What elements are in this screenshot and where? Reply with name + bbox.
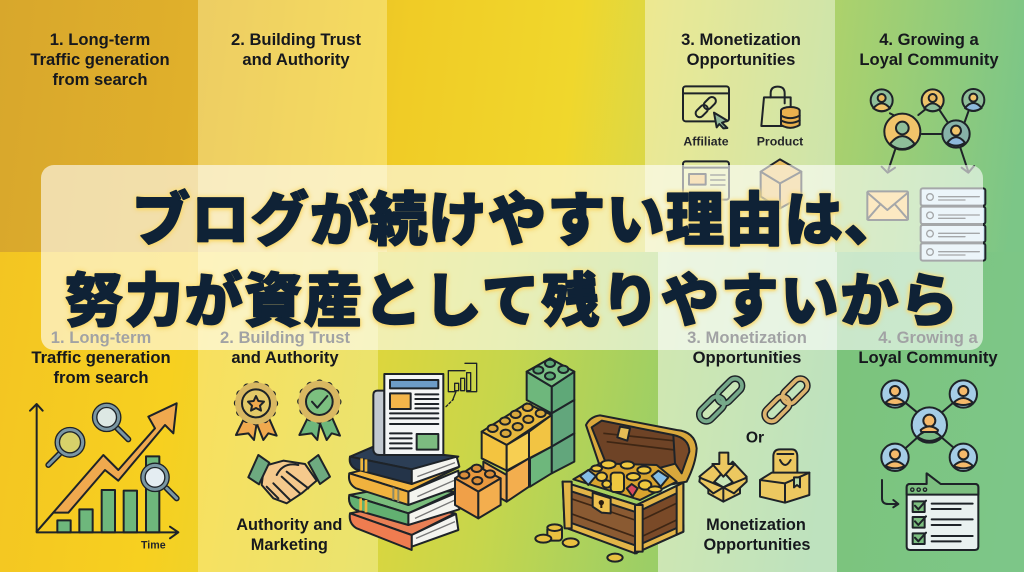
icon: loose coins — [535, 524, 623, 562]
hub person — [912, 407, 947, 443]
arrow heads — [882, 166, 974, 173]
title line 1: ブログが続けやすい理由は、 — [132, 188, 902, 253]
label: monetization opportunities: Opportunities — [703, 536, 811, 554]
upper heading 4: 4. Growing a — [879, 30, 980, 49]
person top right — [950, 380, 977, 408]
upper heading 1: Traffic generation — [30, 50, 170, 69]
panel: authority icons — [236, 383, 342, 554]
bars — [57, 456, 159, 532]
upper heading 3: 3. Monetization — [681, 30, 801, 49]
icon: check medal — [299, 383, 340, 440]
lower heading 3: Opportunities — [693, 348, 801, 367]
icon: faded content window — [683, 161, 729, 200]
icon: stacked list — [921, 188, 985, 261]
icon: shopping bag and coins — [761, 87, 800, 128]
icon: orange chain link — [762, 376, 810, 424]
icon: building blocks — [455, 358, 574, 518]
label: or: Or — [746, 430, 764, 447]
background: lower gradient — [0, 252, 1024, 572]
panel: upper community icons — [867, 89, 985, 261]
community hub small — [942, 120, 970, 148]
upper heading 2: 2. Building Trust — [231, 30, 361, 49]
lower light column 2 — [198, 252, 378, 572]
lower heading 2: 2. Building Trust — [220, 328, 350, 347]
icon: envelope — [867, 191, 908, 220]
label: monetization opportunities: Monetization — [706, 516, 806, 534]
upper heading 3: Opportunities — [687, 50, 795, 69]
lower heading 3: 3. Monetization — [687, 328, 807, 347]
translucent title panel — [41, 165, 983, 350]
icon: handshake — [248, 455, 330, 503]
magnifier on bar — [143, 465, 177, 498]
network connector lines — [888, 108, 968, 172]
icon: stacked books — [349, 447, 459, 550]
community member 1 — [871, 89, 893, 111]
axes — [30, 404, 178, 538]
panel: lower community icons — [881, 380, 978, 550]
arrow — [882, 480, 898, 507]
upper heading 1: from search — [52, 70, 148, 89]
magnifier top — [95, 405, 128, 439]
icon: newspaper — [373, 374, 443, 455]
upper light column 2 — [198, 0, 387, 252]
person bottom right — [950, 444, 977, 471]
panel: central assets illustration — [349, 358, 697, 562]
icon: treasure chest — [563, 415, 697, 553]
background: upper gradient — [0, 0, 1024, 252]
lower heading 2: and Authority — [231, 348, 339, 367]
icon: checklist window — [907, 473, 978, 550]
panel: lower monetization icons — [696, 376, 811, 554]
label: authority and marketing: Authority and — [236, 516, 342, 534]
panel: upper monetization icons — [683, 86, 803, 208]
lower heading 4: Loyal Community — [858, 348, 998, 367]
network connector lines — [900, 398, 958, 452]
community member 3 — [962, 89, 984, 111]
community member 2 — [922, 89, 944, 111]
label: affiliate: Affiliate — [683, 134, 729, 148]
lower heading 1: Traffic generation — [31, 348, 171, 367]
growth arrow — [37, 403, 177, 532]
upper heading 4: Loyal Community — [859, 50, 999, 69]
lower heading 1: from search — [54, 368, 148, 387]
lower heading 4: 4. Growing a — [878, 328, 979, 347]
lower light column 3 — [658, 252, 837, 572]
icon: faded parcel box — [761, 159, 801, 208]
upper heading 2: and Authority — [242, 50, 350, 69]
upper light column 3 — [645, 0, 835, 252]
chart: traffic growth — [30, 403, 178, 552]
community hub large — [884, 114, 920, 150]
label: authority and marketing: Marketing — [251, 536, 328, 554]
magnifier left — [48, 430, 83, 465]
title line 2: 努力が資産として残りやすいから — [65, 269, 958, 334]
icon: green chain link — [696, 376, 745, 424]
person bottom left — [881, 444, 909, 471]
title — [65, 188, 958, 334]
person top left — [881, 380, 909, 408]
axis label: time: Time — [141, 540, 166, 552]
icon: parcel with bag — [760, 449, 809, 503]
icon: affiliate browser window — [683, 86, 729, 128]
upper heading 1: 1. Long-term — [50, 30, 150, 49]
icon: star medal — [236, 385, 277, 440]
label: product: Product — [757, 134, 803, 148]
icon: chart bubble — [446, 363, 477, 407]
lower heading 1: 1. Long-term — [51, 328, 151, 347]
icon: open box — [699, 453, 747, 502]
